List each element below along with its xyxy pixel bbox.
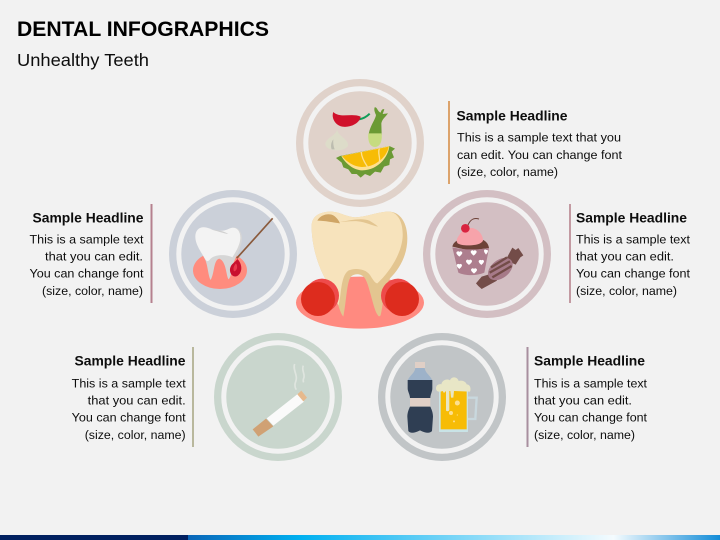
body: This is a sample text — [534, 376, 648, 390]
body: (size, color, name) — [457, 165, 558, 179]
body: This is a sample text — [72, 376, 186, 390]
panel: bleeding gum icon — [169, 190, 297, 318]
body: (size, color, name) — [576, 284, 677, 298]
body: that you can edit. — [45, 250, 143, 264]
panel: spicy and sour foods icon — [296, 79, 424, 207]
icon: blood drop — [230, 259, 241, 276]
body: You can change font — [30, 266, 144, 280]
icon: beer mug — [436, 377, 477, 432]
text block: top right — [448, 101, 623, 184]
icon: white tooth — [195, 227, 242, 280]
icon: gum — [193, 252, 247, 289]
body: (size, color, name) — [534, 428, 635, 442]
headline: Sample Headline — [32, 210, 144, 226]
icon: cupcake — [452, 218, 489, 275]
text block: bottom right — [526, 347, 648, 447]
accent bar — [150, 204, 152, 303]
headline: Sample Headline — [74, 352, 186, 368]
text block: left — [30, 204, 152, 303]
icon: soda bottle — [407, 362, 433, 433]
body — [576, 232, 691, 298]
accent bar — [448, 101, 450, 184]
headline: Sample Headline — [576, 210, 687, 226]
icon: smoke — [294, 364, 304, 390]
footer bar — [0, 535, 720, 540]
swollen gum right — [381, 279, 419, 316]
body: You can change font — [576, 266, 691, 280]
body: This is a sample text — [576, 232, 691, 246]
headline: Sample Headline — [534, 352, 645, 368]
text block: bottom left — [72, 347, 194, 447]
text block: right — [569, 204, 691, 303]
icon: garlic — [325, 129, 348, 150]
swollen gum left — [301, 279, 339, 316]
accent bar — [526, 347, 528, 447]
panel: sweets icon — [423, 190, 551, 318]
accent bar — [569, 204, 571, 303]
body — [72, 376, 186, 442]
body: that you can edit. — [534, 393, 632, 407]
gum — [296, 277, 424, 329]
crack — [340, 219, 378, 227]
icon: chili pepper — [333, 112, 370, 127]
body: You can change font — [534, 410, 648, 424]
body: This is a sample text — [30, 232, 144, 246]
panel: cigarette icon — [214, 333, 342, 461]
body — [30, 232, 144, 298]
decayed tooth — [312, 212, 407, 317]
cavity — [317, 214, 340, 223]
title: DENTAL INFOGRAPHICS — [17, 17, 269, 41]
icon: toothpick — [237, 218, 273, 258]
icon: cigarette — [253, 391, 307, 437]
icon: green onion — [368, 107, 388, 147]
panel: soda and beer icon — [378, 333, 506, 461]
body — [534, 376, 648, 442]
body: that you can edit. — [88, 393, 186, 407]
body: This is a sample text that you — [457, 131, 621, 145]
accent bar — [192, 347, 194, 447]
icon: durian slice — [336, 146, 395, 178]
body: You can change font — [72, 410, 186, 424]
icon: wrapped candy — [476, 248, 523, 289]
body: (size, color, name) — [42, 284, 143, 298]
body: (size, color, name) — [85, 428, 186, 442]
body: that you can edit. — [576, 250, 674, 264]
subtitle: Unhealthy Teeth — [17, 50, 149, 70]
headline: Sample Headline — [456, 108, 568, 124]
body: can edit. You can change font — [457, 148, 623, 162]
body — [457, 131, 623, 179]
central illustration: unhealthy tooth — [296, 212, 424, 329]
